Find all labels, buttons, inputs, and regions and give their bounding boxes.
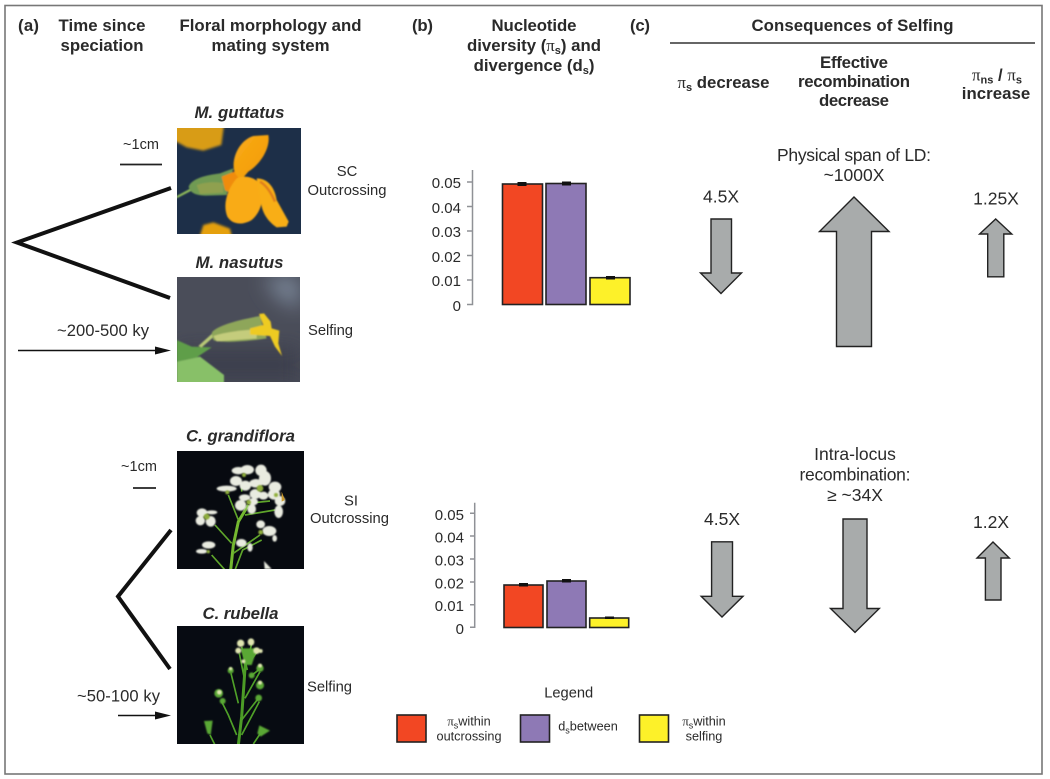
heading: nucleotide diversity and divergence: s — [583, 65, 589, 77]
column heading: pi ns over pi s increase: π — [1007, 66, 1016, 84]
heading: time since speciation: Time since — [58, 16, 146, 35]
arrow: pi decrease Mimulus — [700, 219, 742, 294]
value label: physical span of LD: ~1000X — [824, 165, 885, 185]
column heading: effective recombination decrease: Effective — [820, 53, 888, 72]
photo: M. guttatus flower — [173, 125, 301, 237]
value label: intra-locus recombination: recombination: — [800, 464, 910, 484]
y axis labels: 0 — [456, 621, 464, 638]
phylogeny branches: Mimulus — [17, 188, 171, 298]
heading: nucleotide diversity and divergence: ) and — [561, 36, 601, 55]
legend title: Legend — [544, 686, 593, 702]
swatch: pi within selfing — [640, 715, 668, 742]
panel letter a: (a) — [18, 16, 39, 35]
value label: physical span of LD — [777, 145, 931, 185]
mating system label: SI outcrossing — [310, 494, 389, 527]
label: pi within selfing: within — [692, 714, 726, 728]
y axis labels: 0.05 — [435, 507, 464, 524]
column heading: pi ns over pi s increase: π — [972, 66, 981, 84]
value label: intra-locus recombination: ≥ ~34X — [827, 485, 883, 505]
label: pi within selfing: π — [682, 714, 689, 728]
value label: 4.5X Capsella: 4.5X — [704, 509, 740, 529]
label: pi within outcrossing: π — [447, 714, 454, 728]
label: ds between: between — [570, 720, 618, 734]
y axis labels: 0.02 — [435, 576, 464, 592]
y axis labels: 0.05 — [432, 175, 461, 192]
label: ds between: s — [565, 726, 570, 736]
mating system label: SI outcrossing: Outcrossing — [310, 511, 389, 527]
value label: 1.2X: 1.2X — [973, 512, 1009, 532]
y axis labels: 0.04 — [435, 530, 464, 546]
divergence time: 50-100 ky: ~50-100 ky — [77, 687, 161, 706]
mating system label: SC outcrossing — [308, 164, 386, 199]
y axis labels — [435, 507, 464, 638]
y axis labels: 0.02 — [432, 249, 461, 266]
y axis labels: 0.01 — [432, 273, 461, 290]
panel letter b: (b) — [412, 16, 433, 35]
species label: M. guttatus: M. guttatus — [194, 103, 284, 122]
photo: C. grandiflora inflorescence — [177, 451, 304, 570]
heading: nucleotide diversity and divergence: Nucleotide — [492, 16, 576, 35]
label: pi within outcrossing: within — [457, 714, 491, 728]
value label: intra-locus recombination — [800, 444, 910, 505]
arrow: pi ratio increase Capsella — [977, 542, 1009, 600]
column heading: effective recombination decrease — [798, 53, 910, 110]
panel letter c: (c) — [630, 16, 650, 35]
y axis — [470, 503, 475, 627]
legend — [397, 686, 726, 744]
heading: nucleotide diversity and divergence: diversity (π — [467, 36, 555, 55]
column heading: effective recombination decrease: recombination — [798, 72, 910, 91]
y axis — [467, 170, 472, 304]
error bars — [518, 182, 615, 280]
y axis labels: 0 — [453, 298, 461, 315]
panel a: time since speciation and floral morphology — [17, 16, 389, 745]
column heading: effective recombination decrease: decrease — [819, 91, 889, 110]
label: pi within selfing: selfing — [686, 730, 722, 744]
scale bar: 1 cm Mimulus: ~1cm — [123, 137, 159, 153]
species label: C. rubella: C. rubella — [202, 604, 278, 623]
arrow: pi ratio increase Mimulus — [980, 219, 1012, 277]
column heading: pi ns over pi s increase: increase — [962, 84, 1030, 103]
label: pi within selfing: s — [689, 720, 694, 730]
heading: nucleotide diversity and divergence: divergence (d — [474, 56, 583, 75]
arrow: recombination decrease Capsella — [830, 519, 879, 632]
column heading: pi decrease: π — [677, 73, 686, 92]
column heading: pi ns over pi s increase — [962, 66, 1030, 103]
mating system label: SC outcrossing: Outcrossing — [308, 183, 386, 199]
swatch: ds between — [520, 715, 550, 742]
swatch: pi within outcrossing — [397, 715, 426, 742]
photo: M. nasutus flower — [177, 277, 300, 383]
divergence time: 200-500 ky — [18, 321, 171, 354]
bar: ds between — [546, 184, 586, 304]
phylogeny branches: Capsella — [118, 530, 171, 669]
scale bar: 1 cm Mimulus — [120, 137, 162, 164]
divergence time: 50-100 ky — [77, 687, 171, 720]
error bars — [519, 579, 614, 619]
heading: floral morphology and mating system: Floral morphology and — [180, 16, 362, 35]
arrow: recombination decrease Mimulus — [820, 197, 889, 346]
label: pi within outcrossing: s — [454, 720, 459, 730]
column heading: pi decrease: s — [686, 82, 692, 94]
column heading: pi ns over pi s increase: / — [993, 66, 1007, 84]
heading: time since speciation — [58, 16, 146, 55]
bar: pi within outcrossing — [502, 184, 542, 304]
label: ds between: d — [558, 720, 565, 734]
mating system label: selfing: Selfing — [307, 680, 352, 696]
mating system label: selfing: Selfing — [308, 323, 353, 339]
heading: time since speciation: speciation — [60, 36, 144, 55]
scale bar: 1 cm Capsella — [121, 459, 157, 488]
value label: 4.5X Mimulus: 4.5X — [703, 187, 739, 207]
bar: pi within outcrossing — [504, 585, 543, 628]
bar chart: Mimulus — [432, 170, 630, 315]
panel c: consequences of selfing — [630, 16, 1035, 632]
species label: M. nasutus: M. nasutus — [196, 253, 284, 272]
panel b: nucleotide diversity and divergence — [397, 16, 726, 744]
heading: floral morphology and mating system — [180, 16, 362, 55]
column heading: pi ns over pi s increase: ns — [981, 74, 993, 86]
mating system label: SC outcrossing: SC — [337, 164, 358, 180]
y axis labels — [432, 175, 461, 315]
value label: 1.25X: 1.25X — [973, 189, 1019, 209]
y axis labels: 0.03 — [432, 224, 461, 241]
heading: nucleotide diversity and divergence — [467, 16, 601, 77]
scale bar: 1 cm Capsella: ~1cm — [121, 459, 157, 475]
mating system label: SI outcrossing: SI — [344, 494, 358, 510]
species label: C. grandiflora: C. grandiflora — [186, 427, 295, 446]
bar: pi within selfing — [590, 618, 629, 628]
value label: intra-locus recombination: Intra-locus — [814, 444, 896, 464]
arrow: pi decrease Capsella — [701, 542, 743, 617]
photo: C. rubella inflorescence — [177, 626, 304, 745]
y axis labels: 0.03 — [435, 552, 464, 570]
heading: nucleotide diversity and divergence: ) — [589, 56, 594, 75]
column heading: pi ns over pi s increase: s — [1016, 74, 1022, 86]
heading: floral morphology and mating system: mating system — [212, 36, 330, 55]
y axis labels: 0.04 — [432, 200, 461, 217]
label: pi within selfing — [682, 714, 726, 744]
column heading: pi decrease: decrease — [692, 73, 770, 92]
heading: nucleotide diversity and divergence: s — [555, 45, 561, 57]
bar chart: Capsella — [435, 503, 629, 638]
y axis labels: 0.01 — [435, 598, 464, 615]
heading: consequences of selfing: Consequences of Selfing — [752, 16, 954, 35]
bar: ds between — [547, 581, 586, 628]
heading rule — [670, 42, 1035, 44]
label: pi within outcrossing: outcrossing — [436, 730, 502, 744]
divergence time: 200-500 ky: ~200-500 ky — [57, 321, 150, 340]
value label: physical span of LD: Physical span of LD: — [777, 145, 931, 165]
bar: pi within selfing — [590, 278, 630, 304]
label: pi within outcrossing — [436, 714, 502, 744]
